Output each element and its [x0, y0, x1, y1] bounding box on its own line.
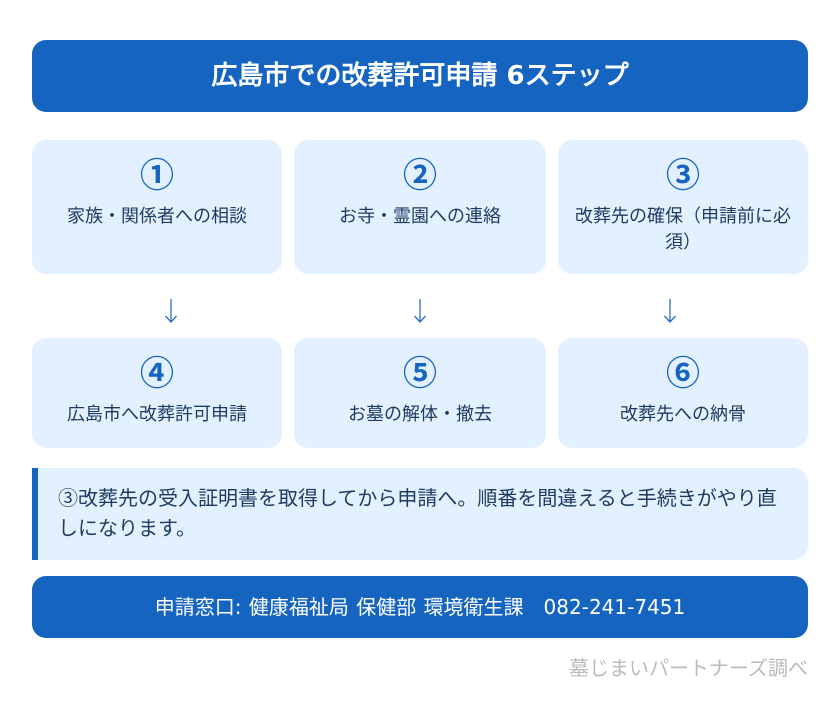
contact bar: 申請窓口: 健康福祉局 保健部 環境衛生課 082-241-7451	[155, 595, 685, 619]
warning note	[32, 468, 808, 560]
step 5 card	[294, 338, 546, 448]
step 1 card: ①	[140, 148, 174, 197]
step 6 card: ⑥	[666, 346, 700, 395]
step 2 card: お寺・霊園への連絡	[339, 202, 501, 228]
step 4 card: 広島市へ改葬許可申請	[67, 404, 247, 425]
step 1 card: 家族・関係者への相談	[67, 202, 247, 228]
step 4 card: ④	[140, 346, 174, 395]
step 4 card	[32, 338, 282, 448]
step 5 card: お墓の解体・撤去	[348, 400, 492, 426]
source credit: 墓じまいパートナーズ調べ	[569, 656, 808, 680]
contact bar	[32, 576, 808, 638]
arrow: step 2 to step 5	[414, 299, 426, 323]
step 6 card: 改葬先への納骨	[620, 404, 746, 425]
step 2 card	[294, 140, 546, 274]
arrow: step 1 to step 4	[165, 299, 177, 323]
step 2 card: ②	[403, 148, 437, 197]
step 3 card	[558, 140, 808, 274]
title	[32, 40, 808, 112]
step 3 card: ③	[666, 148, 700, 197]
step 1 card	[32, 140, 282, 274]
step 6 card	[558, 338, 808, 448]
title: 広島市での改葬許可申請 6ステップ	[211, 61, 629, 91]
step 5 card: ⑤	[403, 346, 437, 395]
warning note: ③改葬先の受入証明書を取得してから申請へ。順番を間違えると手続きがやり直しになります。	[58, 482, 777, 540]
arrow: step 3 to step 6	[664, 299, 676, 323]
step 3 card: 改葬先の確保（申請前に必須）	[575, 206, 791, 253]
